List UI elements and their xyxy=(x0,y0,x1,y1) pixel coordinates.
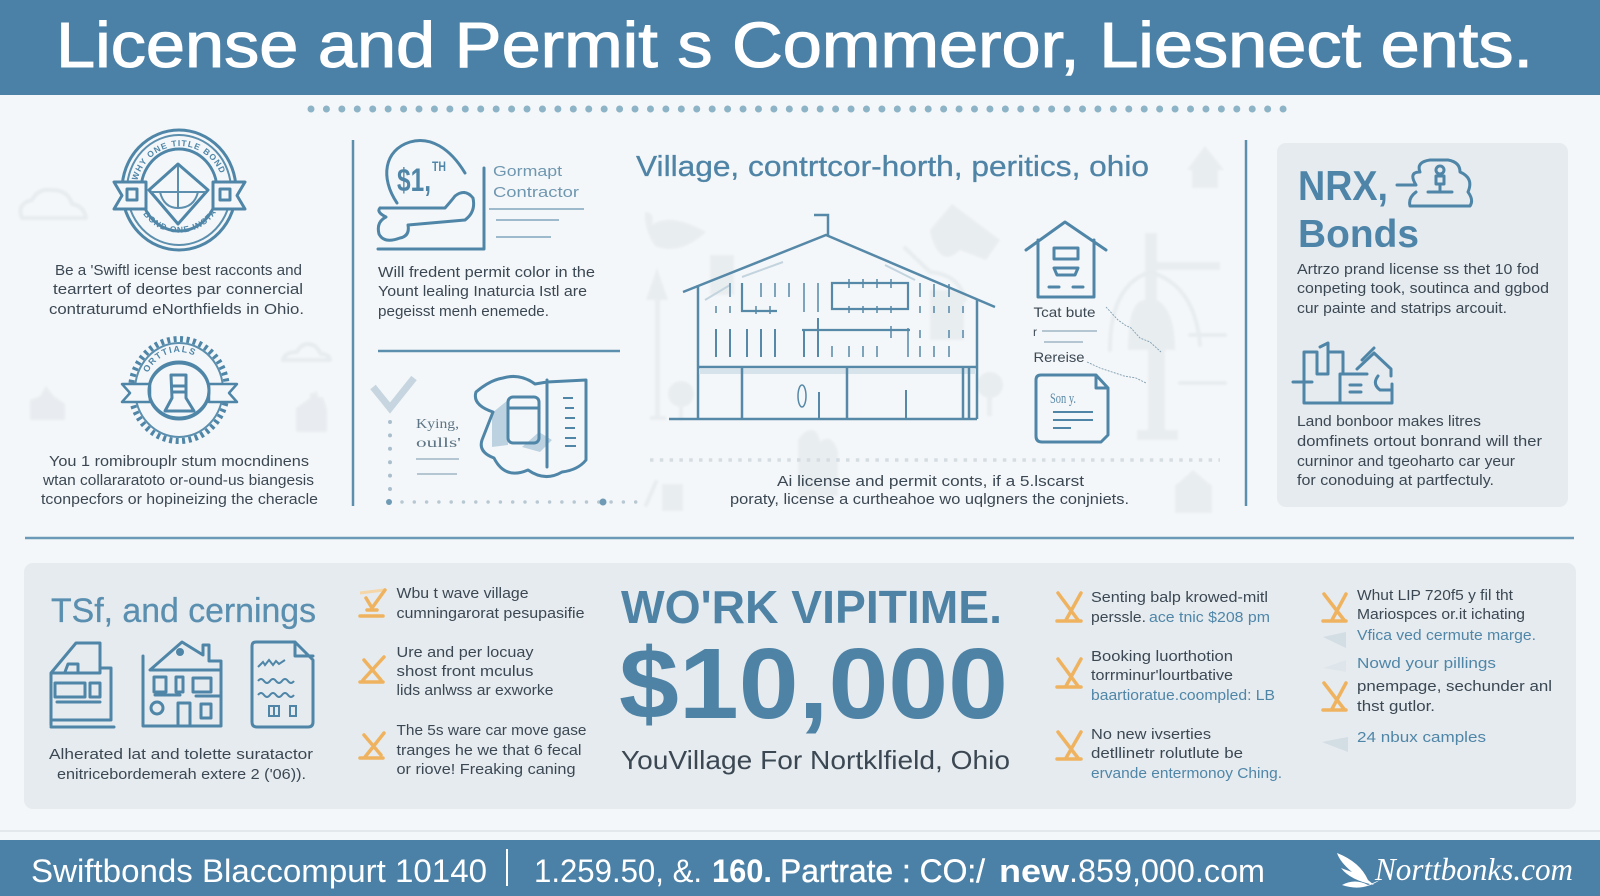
icon: house xyxy=(143,642,221,726)
text block: land bond: for conoduing at partfectuly. xyxy=(1297,473,1494,489)
list text: 24 nbux camples xyxy=(1357,730,1486,746)
footer contact xyxy=(534,853,1265,889)
text block: land bond xyxy=(1297,414,1542,489)
icon: cross xyxy=(1323,683,1346,710)
icon: fee scroll: TH xyxy=(432,158,446,174)
list text: Ure and per locuay xyxy=(396,645,534,661)
heading: village contractor: Village, contrtcor-horth, peritics, ohio xyxy=(636,151,1149,183)
list text: pnempage, sechunder anl xyxy=(1357,679,1552,695)
header banner xyxy=(0,0,1600,95)
panel: bonds xyxy=(1277,143,1568,507)
list text: cumningarorat pesupasifie xyxy=(396,606,584,622)
footer contact: new xyxy=(999,853,1069,889)
icon: small house xyxy=(1026,222,1106,297)
list text: Wbu t wave village xyxy=(396,586,528,602)
footer contact: Partrate : CO:/ xyxy=(780,853,985,889)
faint ticks xyxy=(1322,632,1348,752)
label: keying: oulls' xyxy=(416,436,461,451)
text block: bond requirements: You 1 romibrouplr stum mocndinens xyxy=(49,454,309,470)
footer logo: Norttbonks.com xyxy=(1374,851,1573,887)
icon: storefront xyxy=(51,643,114,727)
subtitle: YouVillage For Nortklfield, Ohio xyxy=(621,745,1010,775)
text block: permit note: pegeisst menh enemede. xyxy=(378,304,549,320)
text block: land bond: domfinets ortout bonrand will ther xyxy=(1297,434,1542,450)
text block: license intro: tearrtert of deortes par connercial xyxy=(53,282,303,298)
label: keying: Kying, xyxy=(416,417,459,432)
dotted divider under header xyxy=(311,106,1285,112)
label: treat bute xyxy=(1033,304,1097,365)
text block: bond requirements: wtan collararatoto or-ound-us biangesis xyxy=(42,473,314,489)
icon: cross xyxy=(1057,593,1081,621)
caption: license and permit: poraty, license a curtheahoe wo uqlgners the conjniets. xyxy=(730,492,1129,508)
list text xyxy=(396,586,586,778)
label: contractor: Gormapt xyxy=(493,163,563,180)
list text: The 5s ware car move gase xyxy=(396,723,586,739)
footer bar xyxy=(0,840,1600,896)
list text: tranges he we that 6 fecal xyxy=(396,743,582,759)
icon: license seal: WHY ONE TITLE BOND xyxy=(132,140,225,180)
heading: bonds xyxy=(1298,162,1419,256)
icon: fee scroll: $1, xyxy=(397,162,431,198)
label: treat bute: Tcat bute xyxy=(1034,304,1096,320)
footer contact: 160. xyxy=(712,853,772,889)
icon: license seal xyxy=(112,128,247,252)
list text xyxy=(1091,590,1282,782)
text block: terms note: enitricebordemerah extere 2 ('06)). xyxy=(57,767,306,783)
icon: land buildings xyxy=(1293,343,1392,403)
title: License and Permit s Commeror, Liesnect ents. xyxy=(56,9,1533,81)
checklist column one xyxy=(360,586,586,778)
text block: terms note xyxy=(49,747,313,783)
footer contact: .859,000.com xyxy=(1069,853,1265,889)
list text: Booking luorthotion xyxy=(1091,649,1233,665)
text block: permit note xyxy=(378,265,595,320)
dotted timeline xyxy=(386,422,640,506)
footer company: Swiftbonds Blaccompurt 10140 xyxy=(31,853,487,889)
panel: permit fee xyxy=(373,140,640,506)
icon: cross xyxy=(360,657,384,682)
big figure block xyxy=(619,581,1010,775)
label: keying xyxy=(416,417,461,474)
footer contact: 1.259.50, &. xyxy=(534,853,702,889)
faint bell tower xyxy=(1110,233,1225,440)
text block: license intro: Be a 'Swiftl icense best racconts and xyxy=(55,263,302,279)
list text: shost front mculus xyxy=(396,664,534,680)
text block: bonds intro: conpeting took, soutinca and ggbod xyxy=(1297,281,1549,297)
panel: license badges xyxy=(41,128,318,508)
icon: hand holding phone xyxy=(475,376,586,477)
icon: cross xyxy=(1323,594,1346,621)
list text: perssle. xyxy=(1091,610,1146,626)
heading: work vipitime: WO'RK VIPITIME. xyxy=(621,581,1002,633)
vertical divider right xyxy=(1245,140,1247,506)
checklist column three xyxy=(1322,588,1552,752)
icon: cross xyxy=(1057,732,1081,759)
icon: cross xyxy=(360,733,384,758)
faint background decorations: left column xyxy=(20,190,330,432)
icon: document: Son y. xyxy=(1050,391,1076,407)
list text: Senting balp krowed-mitl xyxy=(1091,590,1268,606)
dotted line above caption xyxy=(650,458,1220,462)
icon: faint checkmark xyxy=(373,378,414,408)
text block: land bond: curninor and tgeoharto car yeur xyxy=(1297,454,1515,470)
big number: $10,000 xyxy=(619,628,1008,740)
panel: bottom section xyxy=(24,563,1576,809)
list text: or riove! Freaking caning xyxy=(396,762,576,778)
text block: land bond: Land bonboor makes litres xyxy=(1297,414,1481,430)
faint background decorations: centre xyxy=(645,146,1225,513)
text block: bond requirements xyxy=(41,454,318,508)
list text xyxy=(1357,588,1552,746)
text block: permit note: Will fredent permit color in the xyxy=(378,265,595,281)
list text: ace tnic $208 pm xyxy=(1149,610,1270,626)
icon: official seal: ORTTIALS xyxy=(144,346,196,372)
label: treat bute: Rereise xyxy=(1034,349,1085,365)
list text: Mariospces or.it ichating xyxy=(1357,607,1525,623)
text block: license intro: contraturumd eNorthfields in Ohio. xyxy=(49,302,304,318)
list text: thst gutlor. xyxy=(1357,699,1435,715)
list text: No new ivserties xyxy=(1091,727,1211,743)
list text: Nowd your pillings xyxy=(1357,656,1496,672)
icon: paper with waves xyxy=(252,642,313,727)
label: contractor: Contractor xyxy=(493,184,579,201)
icon: document xyxy=(1036,375,1108,442)
list text: detllinetr rolutlute be xyxy=(1091,746,1243,762)
text block: bonds intro: Artrzo prand license ss thet 10 fod xyxy=(1297,262,1539,278)
list text: baartioratue.coompled: LB xyxy=(1091,688,1275,704)
list text: ervande entermonoy Ching. xyxy=(1091,766,1282,782)
horizontal section rule xyxy=(25,537,1574,539)
list text: Whut LIP 720f5 y fil tht xyxy=(1357,588,1513,604)
list text: torrminur'lourtbative xyxy=(1091,668,1233,684)
icon: check xyxy=(360,590,385,616)
icon: cross xyxy=(1057,659,1081,687)
text block: license intro xyxy=(49,263,304,318)
checklist column two xyxy=(1057,590,1282,782)
text block: bonds intro xyxy=(1297,262,1549,317)
vertical divider left xyxy=(352,140,354,506)
text block: permit note: Yount lealing Inaturcia Istl are xyxy=(378,284,587,300)
list text: Vfica ved cermute marge. xyxy=(1357,628,1536,644)
list text: lids anlwss ar exworke xyxy=(396,683,554,699)
heading: bonds: Bonds xyxy=(1298,213,1419,256)
label: contractor xyxy=(489,163,584,237)
label: treat bute: r xyxy=(1033,325,1037,339)
text block: terms note: Alherated lat and tolette suratactor xyxy=(49,747,313,763)
heading: terms and earnings: TSf, and cernings xyxy=(51,592,316,630)
caption: license and permit: Ai license and permit conts, if a 5.lscarst xyxy=(777,474,1084,490)
heading: bonds: NRX, xyxy=(1298,162,1388,209)
illustration: building xyxy=(669,215,995,419)
icon: fee scroll xyxy=(378,140,484,249)
icon: bond cloud xyxy=(1397,160,1472,206)
text block: bond requirements: tconpecfors or hopineizing the cheracle xyxy=(41,492,318,508)
icon: official seal xyxy=(120,336,238,444)
wavy leader lines xyxy=(1087,307,1161,383)
caption: license and permit xyxy=(730,474,1129,508)
text block: bonds intro: cur painte and statrips arcouit. xyxy=(1297,301,1507,317)
